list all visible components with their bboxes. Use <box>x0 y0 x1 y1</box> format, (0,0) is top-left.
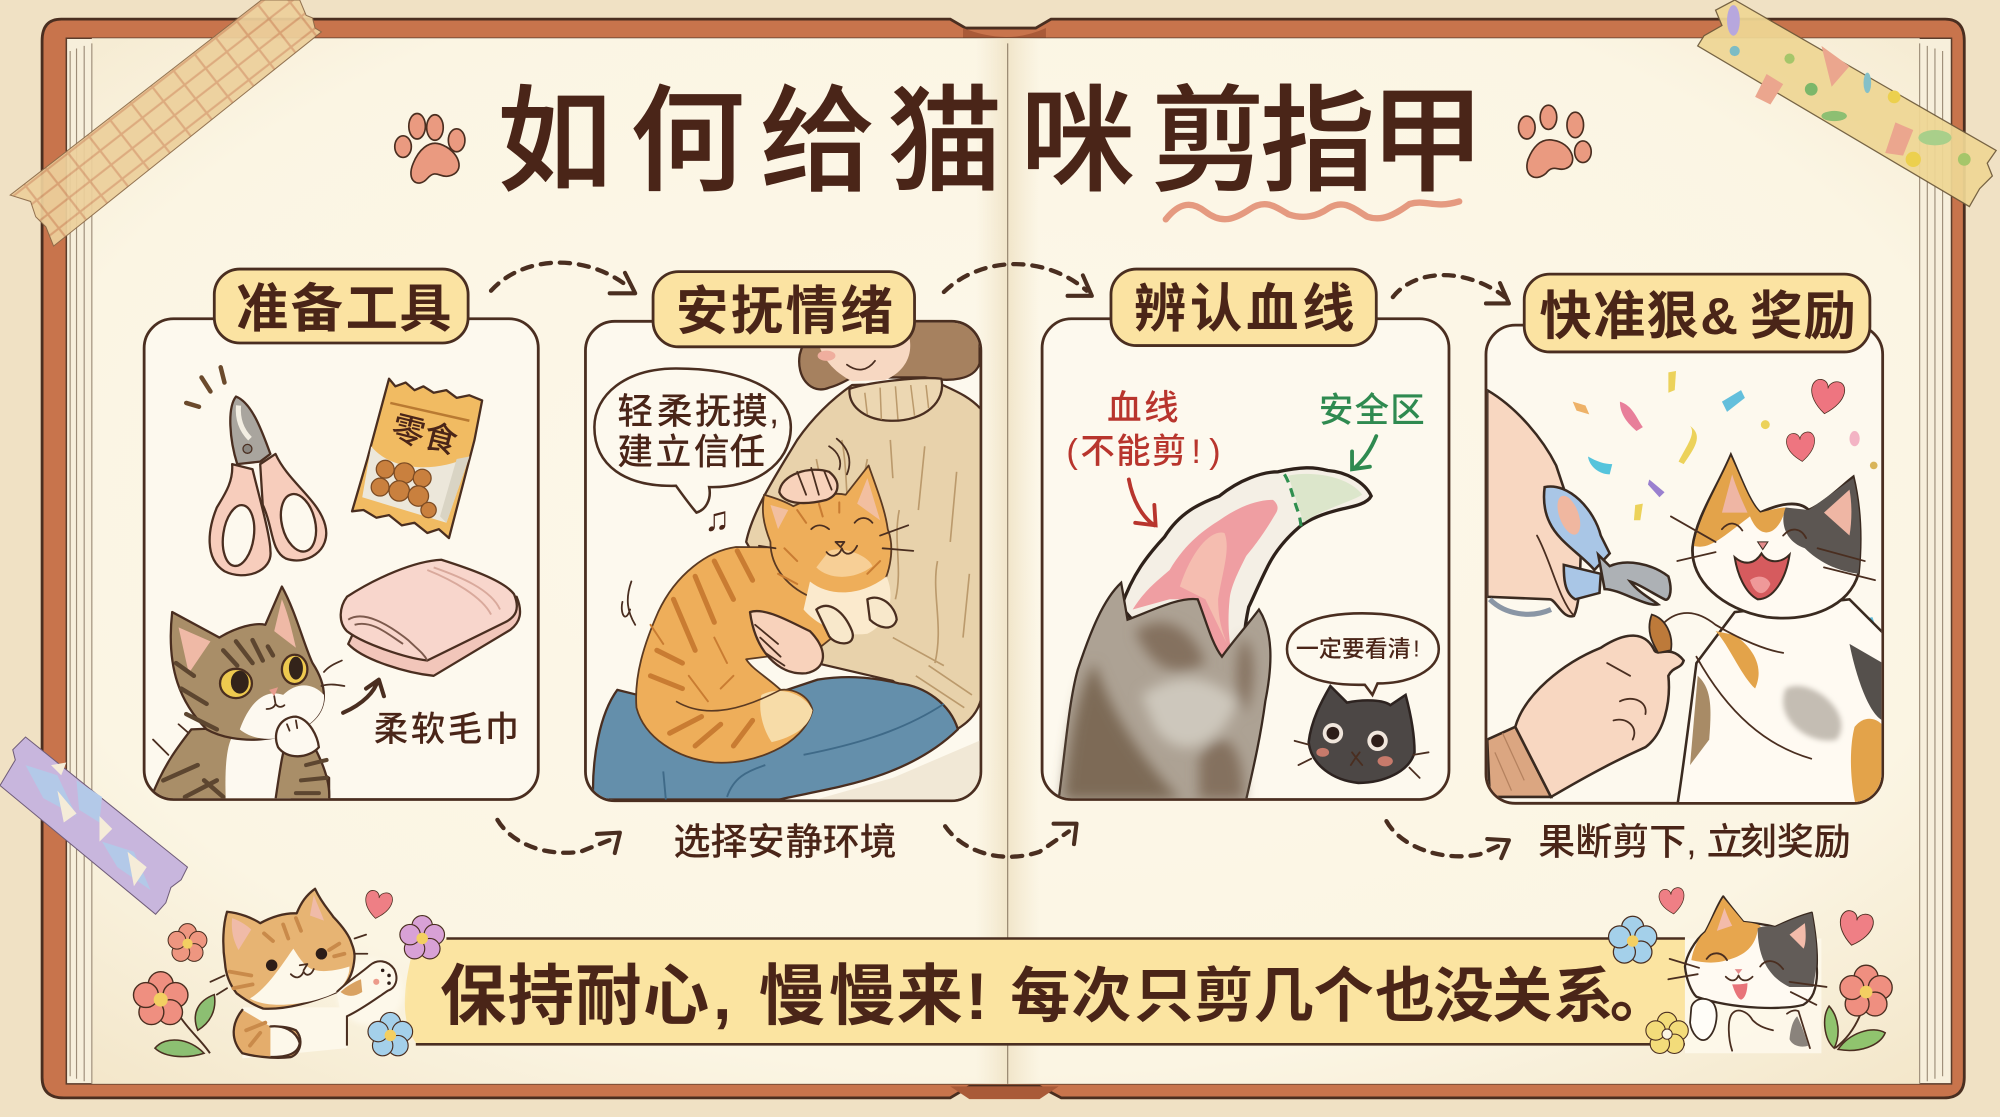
decoration: orange cat left <box>210 889 403 1058</box>
illustration: woman face <box>818 338 910 381</box>
icon: snack bag <box>352 379 482 538</box>
label: quick: 血线 <box>1107 390 1179 428</box>
label: quick: (不能剪!) <box>1066 433 1221 471</box>
illustration: stroking hand <box>779 468 837 503</box>
tape: confetti top right <box>1698 0 1996 207</box>
icon: pink towel <box>341 560 520 676</box>
tape: grid top left <box>10 0 321 246</box>
arrow 3 to 4 <box>1393 275 1509 303</box>
title: 如何给猫咪剪指甲 <box>497 78 1485 206</box>
lower arrow 3 <box>1386 821 1509 858</box>
icon: paw left <box>395 113 465 183</box>
arrow 1 to 2 <box>491 263 635 293</box>
illustration: sweater <box>746 383 982 729</box>
icon: snack bag: 零食 <box>388 410 461 462</box>
illustration: black cat <box>1295 686 1429 783</box>
caption: cut decisively, reward immediately: 果断剪下,立刻奖励 <box>1538 821 1851 862</box>
lower arrow 2 <box>945 824 1077 857</box>
illustration: confetti <box>1573 371 1878 635</box>
caption: choose quiet environment: 选择安静环境 <box>673 821 897 862</box>
icon: arrow to towel <box>343 680 384 713</box>
illustration: jeans <box>593 677 982 799</box>
decoration: calico cat right <box>1668 896 1827 1053</box>
speech bubble: must see clearly: 一定要看清! <box>1296 636 1420 662</box>
illustration: cat paws <box>816 598 897 643</box>
illustration: turtleneck <box>849 378 942 421</box>
icon: sparkle marks <box>186 367 224 407</box>
illustration: woman hair <box>799 321 980 389</box>
arrow: safe zone <box>1352 436 1376 469</box>
illustration: calico cat <box>1665 455 1888 806</box>
bottom banner: 保持耐心,慢慢来! <box>440 960 988 1034</box>
bottom banner <box>405 938 1685 1044</box>
heading pill 1 <box>214 269 468 343</box>
icon: nail clippers <box>210 397 326 575</box>
icon: music note: ♫ <box>704 500 730 538</box>
illustration: supporting hand <box>750 611 823 673</box>
illustration: tabby cat <box>151 587 344 799</box>
bottom banner: 每次只剪几个也没关系。 <box>1010 962 1670 1029</box>
heading pill 3: 辨认血线 <box>1134 280 1355 338</box>
illustration: claw <box>1121 468 1371 659</box>
heading pill 3 <box>1111 269 1376 346</box>
illustration: hand with treat <box>1487 615 1684 797</box>
label: safe zone: 安全区 <box>1319 392 1425 430</box>
speech bubble: must see clearly <box>1287 613 1439 695</box>
icon: motion lines <box>622 439 849 625</box>
speech bubble: 建立信任 <box>617 432 765 472</box>
label: quick <box>1066 390 1221 471</box>
lower arrow 1 <box>497 820 620 853</box>
panel 4: quick and reward <box>1486 325 1888 806</box>
heading pill 2: 安抚情绪 <box>676 283 893 341</box>
caption: soft towel: 柔软毛巾 <box>374 711 519 749</box>
arrow 2 to 3 <box>944 264 1092 296</box>
tape: lilac lower left <box>0 737 188 914</box>
illustration: paw fur <box>1059 583 1270 799</box>
illustration: orange cat body <box>636 465 913 763</box>
panel 3: identify the quick <box>1042 319 1449 799</box>
title underline wave <box>1166 201 1459 219</box>
heading pill 1: 准备工具 <box>236 280 452 338</box>
heading pill 2 <box>653 272 915 347</box>
icon: paw right <box>1518 105 1591 177</box>
panel 2: calm emotions <box>585 321 982 801</box>
decoration: flowers and heart left <box>133 889 445 1057</box>
decoration: flowers and hearts right <box>1609 887 1892 1053</box>
heading pill 4 <box>1524 274 1870 352</box>
speech bubble <box>594 369 791 513</box>
panel 1: prepare tools <box>144 319 538 799</box>
arrow: quick <box>1129 479 1156 525</box>
heading pill 4: 快准狠&奖励 <box>1540 288 1856 346</box>
speech bubble: 轻柔抚摸, <box>617 391 779 431</box>
illustration: hand with clippers <box>1487 390 1671 616</box>
